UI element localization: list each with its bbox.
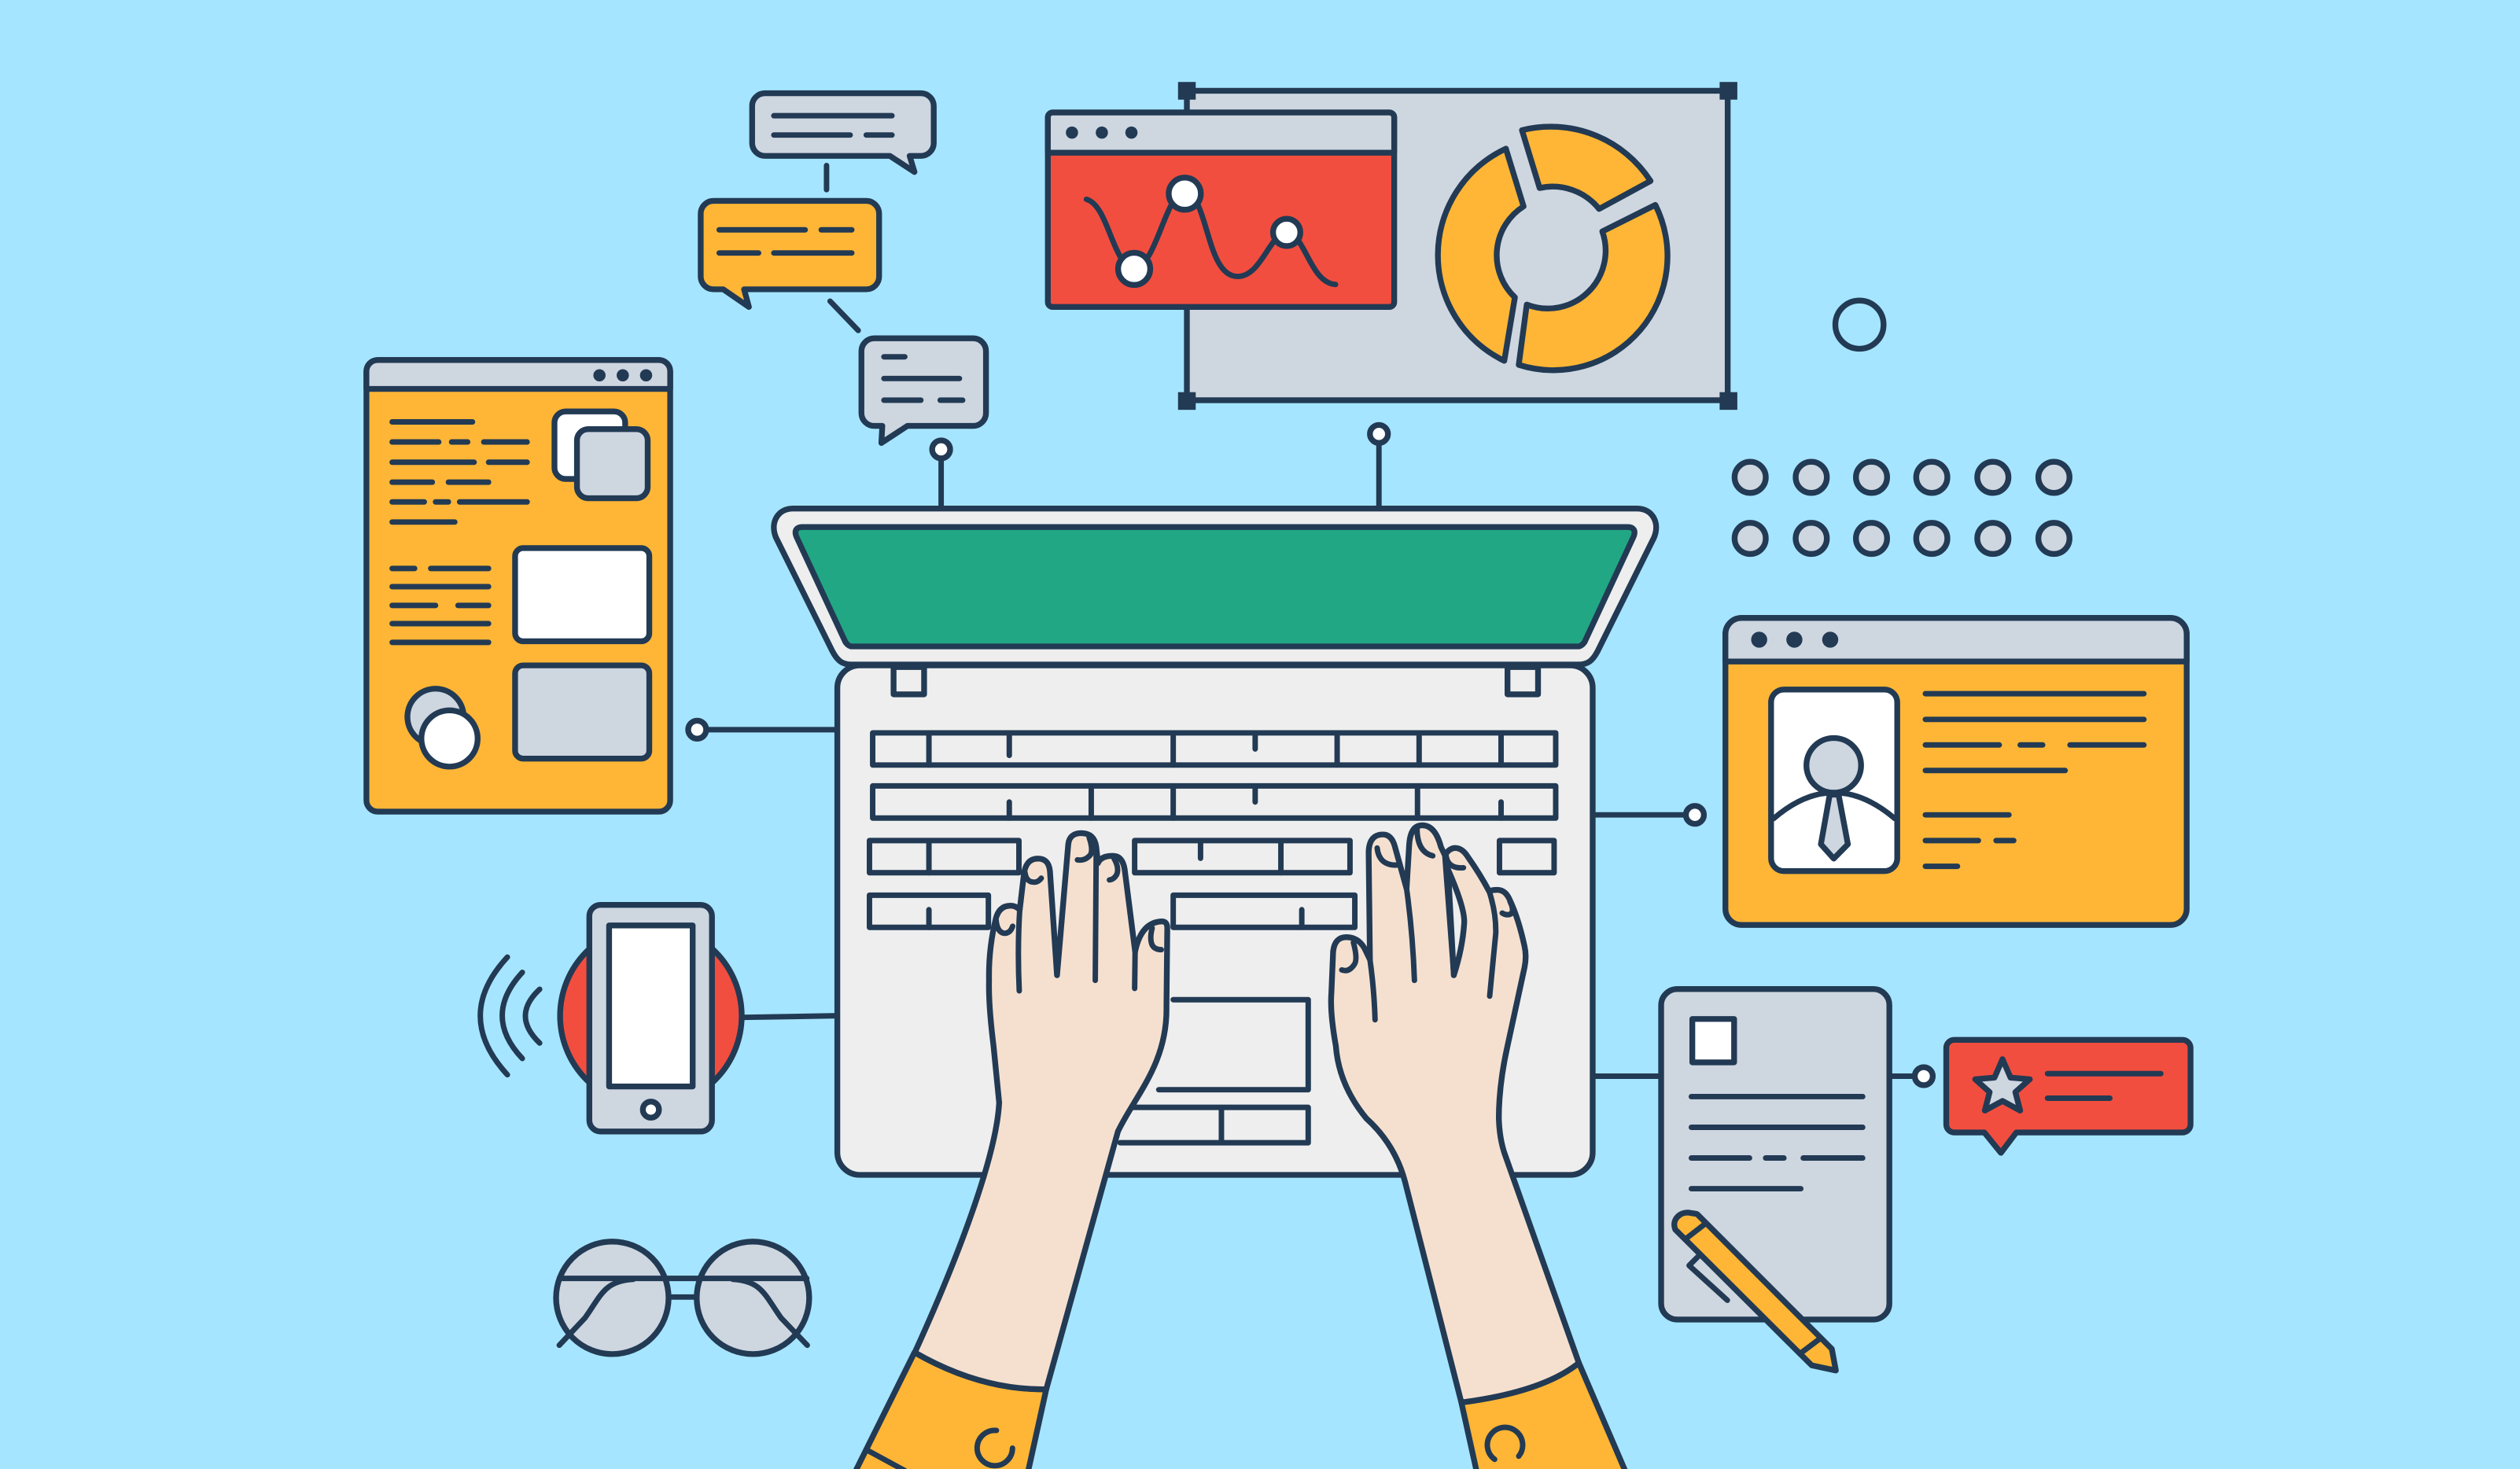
left cuff button <box>977 1430 1012 1466</box>
overlapping circles <box>407 689 477 767</box>
right sleeve <box>1461 1363 1626 1469</box>
speech bubble: top grey <box>752 94 934 172</box>
overlapping cards <box>554 411 647 499</box>
grey image placeholder <box>515 665 650 759</box>
window dots <box>593 369 652 381</box>
laptop lid <box>774 509 1656 665</box>
panel: orange document window <box>367 360 670 812</box>
window dots <box>1751 631 1838 648</box>
phone with signal <box>481 905 742 1132</box>
pencil <box>1674 1213 1836 1371</box>
left fingernails <box>996 838 1162 950</box>
laptop base <box>838 665 1593 1175</box>
glasses <box>556 1242 809 1354</box>
laptop <box>774 509 1656 1175</box>
decorative circle <box>1836 300 1884 348</box>
connector pins <box>688 425 1932 1085</box>
text lines top <box>392 422 527 522</box>
right hand <box>1331 825 1626 1469</box>
panel: chart board <box>1178 82 1737 410</box>
left hand <box>855 833 1167 1469</box>
speech bubble: orange <box>701 201 879 307</box>
hinges <box>893 667 1538 694</box>
panel: paper document <box>1661 989 1889 1371</box>
star <box>1975 1059 2030 1110</box>
right arm and fingers <box>1331 825 1579 1402</box>
panel: red rating bubble <box>1947 1040 2190 1153</box>
connector lines <box>707 166 1913 1077</box>
donut chart <box>1438 127 1667 370</box>
keyboard <box>869 733 1556 927</box>
white image placeholder <box>515 548 650 641</box>
right fingernails <box>1342 828 1512 970</box>
profile photo <box>1771 690 1897 871</box>
left cuff seam <box>866 1449 904 1469</box>
gap between right fingers <box>1448 870 1464 975</box>
speech bubble: right grey <box>861 338 986 443</box>
signal waves <box>481 957 540 1075</box>
right cuff button <box>1487 1427 1523 1460</box>
trackpad <box>1120 1000 1308 1143</box>
window dots <box>1066 127 1137 138</box>
board corner handles <box>1178 82 1737 410</box>
dot grid <box>1734 462 2069 554</box>
panel: profile window <box>1726 618 2187 925</box>
text lines bottom <box>392 569 488 642</box>
laptop screen <box>795 527 1634 646</box>
panel: red line chart window <box>1048 112 1394 307</box>
left arm and fingers <box>915 833 1167 1390</box>
right finger lines <box>1370 855 1496 1020</box>
left sleeve <box>855 1353 1046 1469</box>
profile text lines <box>1925 694 2144 867</box>
left finger lines <box>1019 847 1135 991</box>
line chart <box>1086 178 1336 285</box>
